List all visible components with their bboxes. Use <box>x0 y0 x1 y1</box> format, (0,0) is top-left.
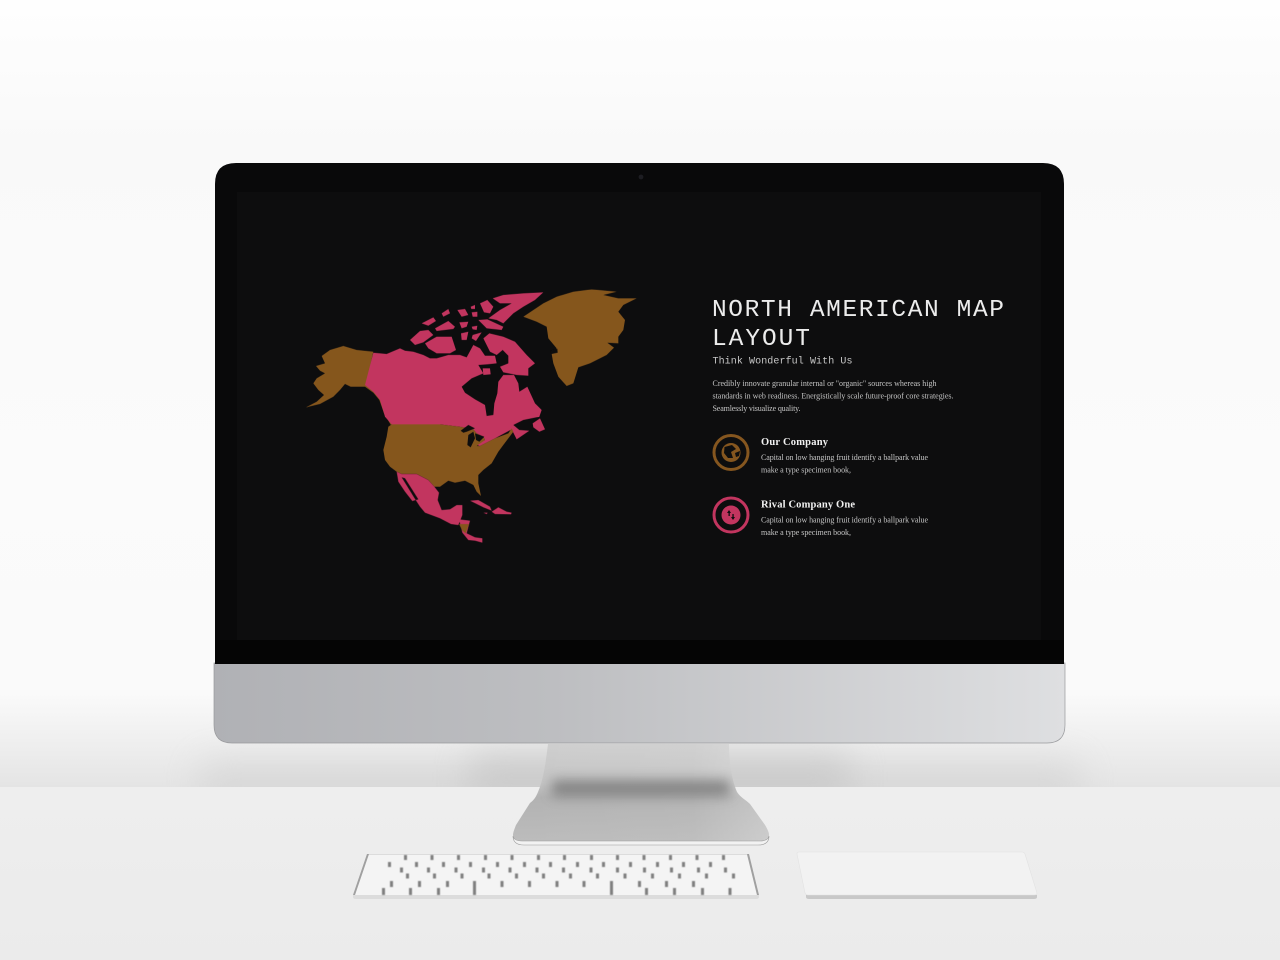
description <box>761 453 928 474</box>
mexico <box>397 472 462 525</box>
guatemala to panama <box>459 519 482 543</box>
canada <box>365 292 545 446</box>
description: Capital on low hanging fruit identify a ballpark value <box>761 516 928 524</box>
caribbean islands <box>470 500 512 514</box>
intro paragraph <box>712 379 954 413</box>
webcam <box>639 175 643 179</box>
north america map <box>306 289 637 543</box>
icon: globe ring <box>714 436 748 470</box>
heading: Rival Company One <box>761 500 855 510</box>
legend item: rival company one <box>714 498 928 537</box>
heading: Our Company <box>761 437 829 448</box>
icon: arrows ring <box>714 498 748 532</box>
title: LAYOUT <box>712 326 810 353</box>
subtitle: Think Wonderful With Us <box>712 356 852 368</box>
monitor chin <box>214 663 1065 743</box>
newfoundland <box>533 418 545 432</box>
gulf of california <box>402 477 418 500</box>
united states <box>383 424 513 496</box>
central america brown <box>459 524 469 533</box>
description: Capital on low hanging fruit identify a ballpark value <box>761 453 928 462</box>
alaska <box>306 346 393 425</box>
intro paragraph: Seamlessly visualize quality. <box>712 404 800 413</box>
title <box>712 297 1004 353</box>
trackpad <box>797 852 1037 899</box>
great lakes <box>461 425 484 447</box>
canada mainland <box>365 345 542 446</box>
greenland <box>523 289 637 386</box>
mexico and central america <box>397 472 512 543</box>
description <box>761 516 928 537</box>
keyboard <box>353 854 759 899</box>
intro paragraph: standards in web readiness. Energistically scale future-proof core strategies. <box>712 392 954 400</box>
arctic islands <box>410 292 543 376</box>
intro paragraph: Credibly innovate granular internal or "organic" sources whereas high <box>712 379 936 388</box>
legend item: our company <box>714 436 928 474</box>
monitor stand <box>513 744 769 845</box>
monitor bezel <box>215 163 1064 664</box>
greenland inlets <box>550 343 618 354</box>
description: make a type specimen book, <box>761 466 851 474</box>
keyboard key gaps <box>382 855 735 895</box>
screen <box>237 192 1041 640</box>
description: make a type specimen book, <box>761 528 851 537</box>
title: NORTH AMERICAN MAP <box>712 297 1004 324</box>
monitor body <box>214 163 1065 743</box>
